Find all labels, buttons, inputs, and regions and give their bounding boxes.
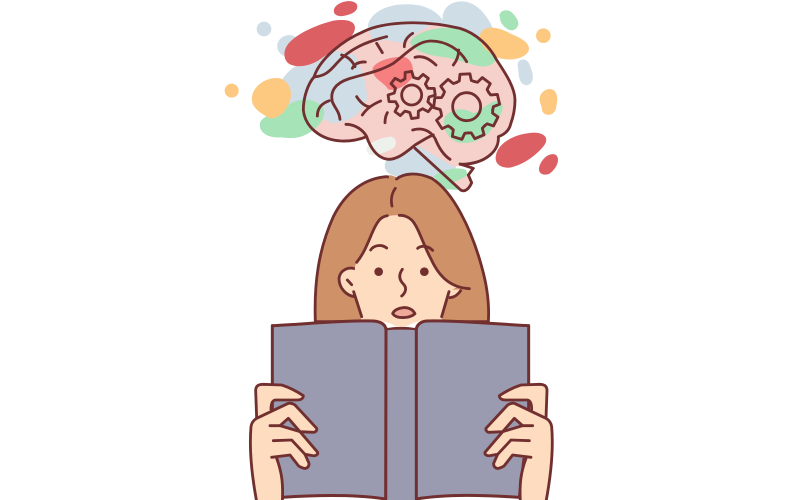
palm and fingers fill — [485, 403, 552, 500]
brainstem tip fill — [453, 175, 472, 191]
book right cover — [416, 321, 529, 499]
open book and hands — [250, 321, 552, 500]
right hand — [485, 384, 552, 500]
page sliver left — [382, 321, 397, 328]
blobs: red — [284, 1, 558, 175]
blob: pink-red patch in brain — [373, 57, 413, 90]
gap in hair top outline — [389, 177, 395, 179]
palm and finger outlines — [485, 403, 552, 500]
brain fill — [304, 23, 515, 167]
gap between index and middle finger — [280, 418, 297, 430]
icon: small gear — [385, 69, 438, 121]
right ear — [440, 289, 460, 298]
nose — [400, 269, 406, 296]
blob: top blue inside brain — [368, 22, 433, 43]
hair and face — [315, 174, 489, 327]
palm and finger outlines — [250, 403, 318, 500]
back finger — [256, 384, 303, 418]
hair parting — [391, 188, 395, 206]
mouth — [393, 308, 415, 318]
left ear — [339, 268, 357, 297]
blobs: green — [260, 10, 518, 190]
hair — [315, 174, 489, 322]
page sliver right — [406, 321, 421, 328]
left hand — [250, 384, 318, 500]
blobs: orange — [225, 28, 557, 118]
icon: large gear — [431, 72, 502, 142]
eyes — [374, 267, 429, 276]
blob: pale patch on brain — [367, 137, 396, 155]
palm and fingers fill — [250, 403, 318, 500]
book spine — [386, 328, 417, 500]
eyebrows — [371, 246, 387, 250]
gap between index and middle finger — [506, 418, 523, 430]
blob: blue dots and pills behind brain — [257, 1, 533, 178]
blob: blue overlay on brain — [278, 50, 367, 123]
brain outline and folds — [303, 23, 515, 191]
back finger — [499, 384, 547, 418]
face outline — [347, 215, 469, 317]
colour blobs and brain fill — [225, 1, 558, 190]
face — [353, 215, 457, 327]
book left cover — [272, 321, 386, 499]
